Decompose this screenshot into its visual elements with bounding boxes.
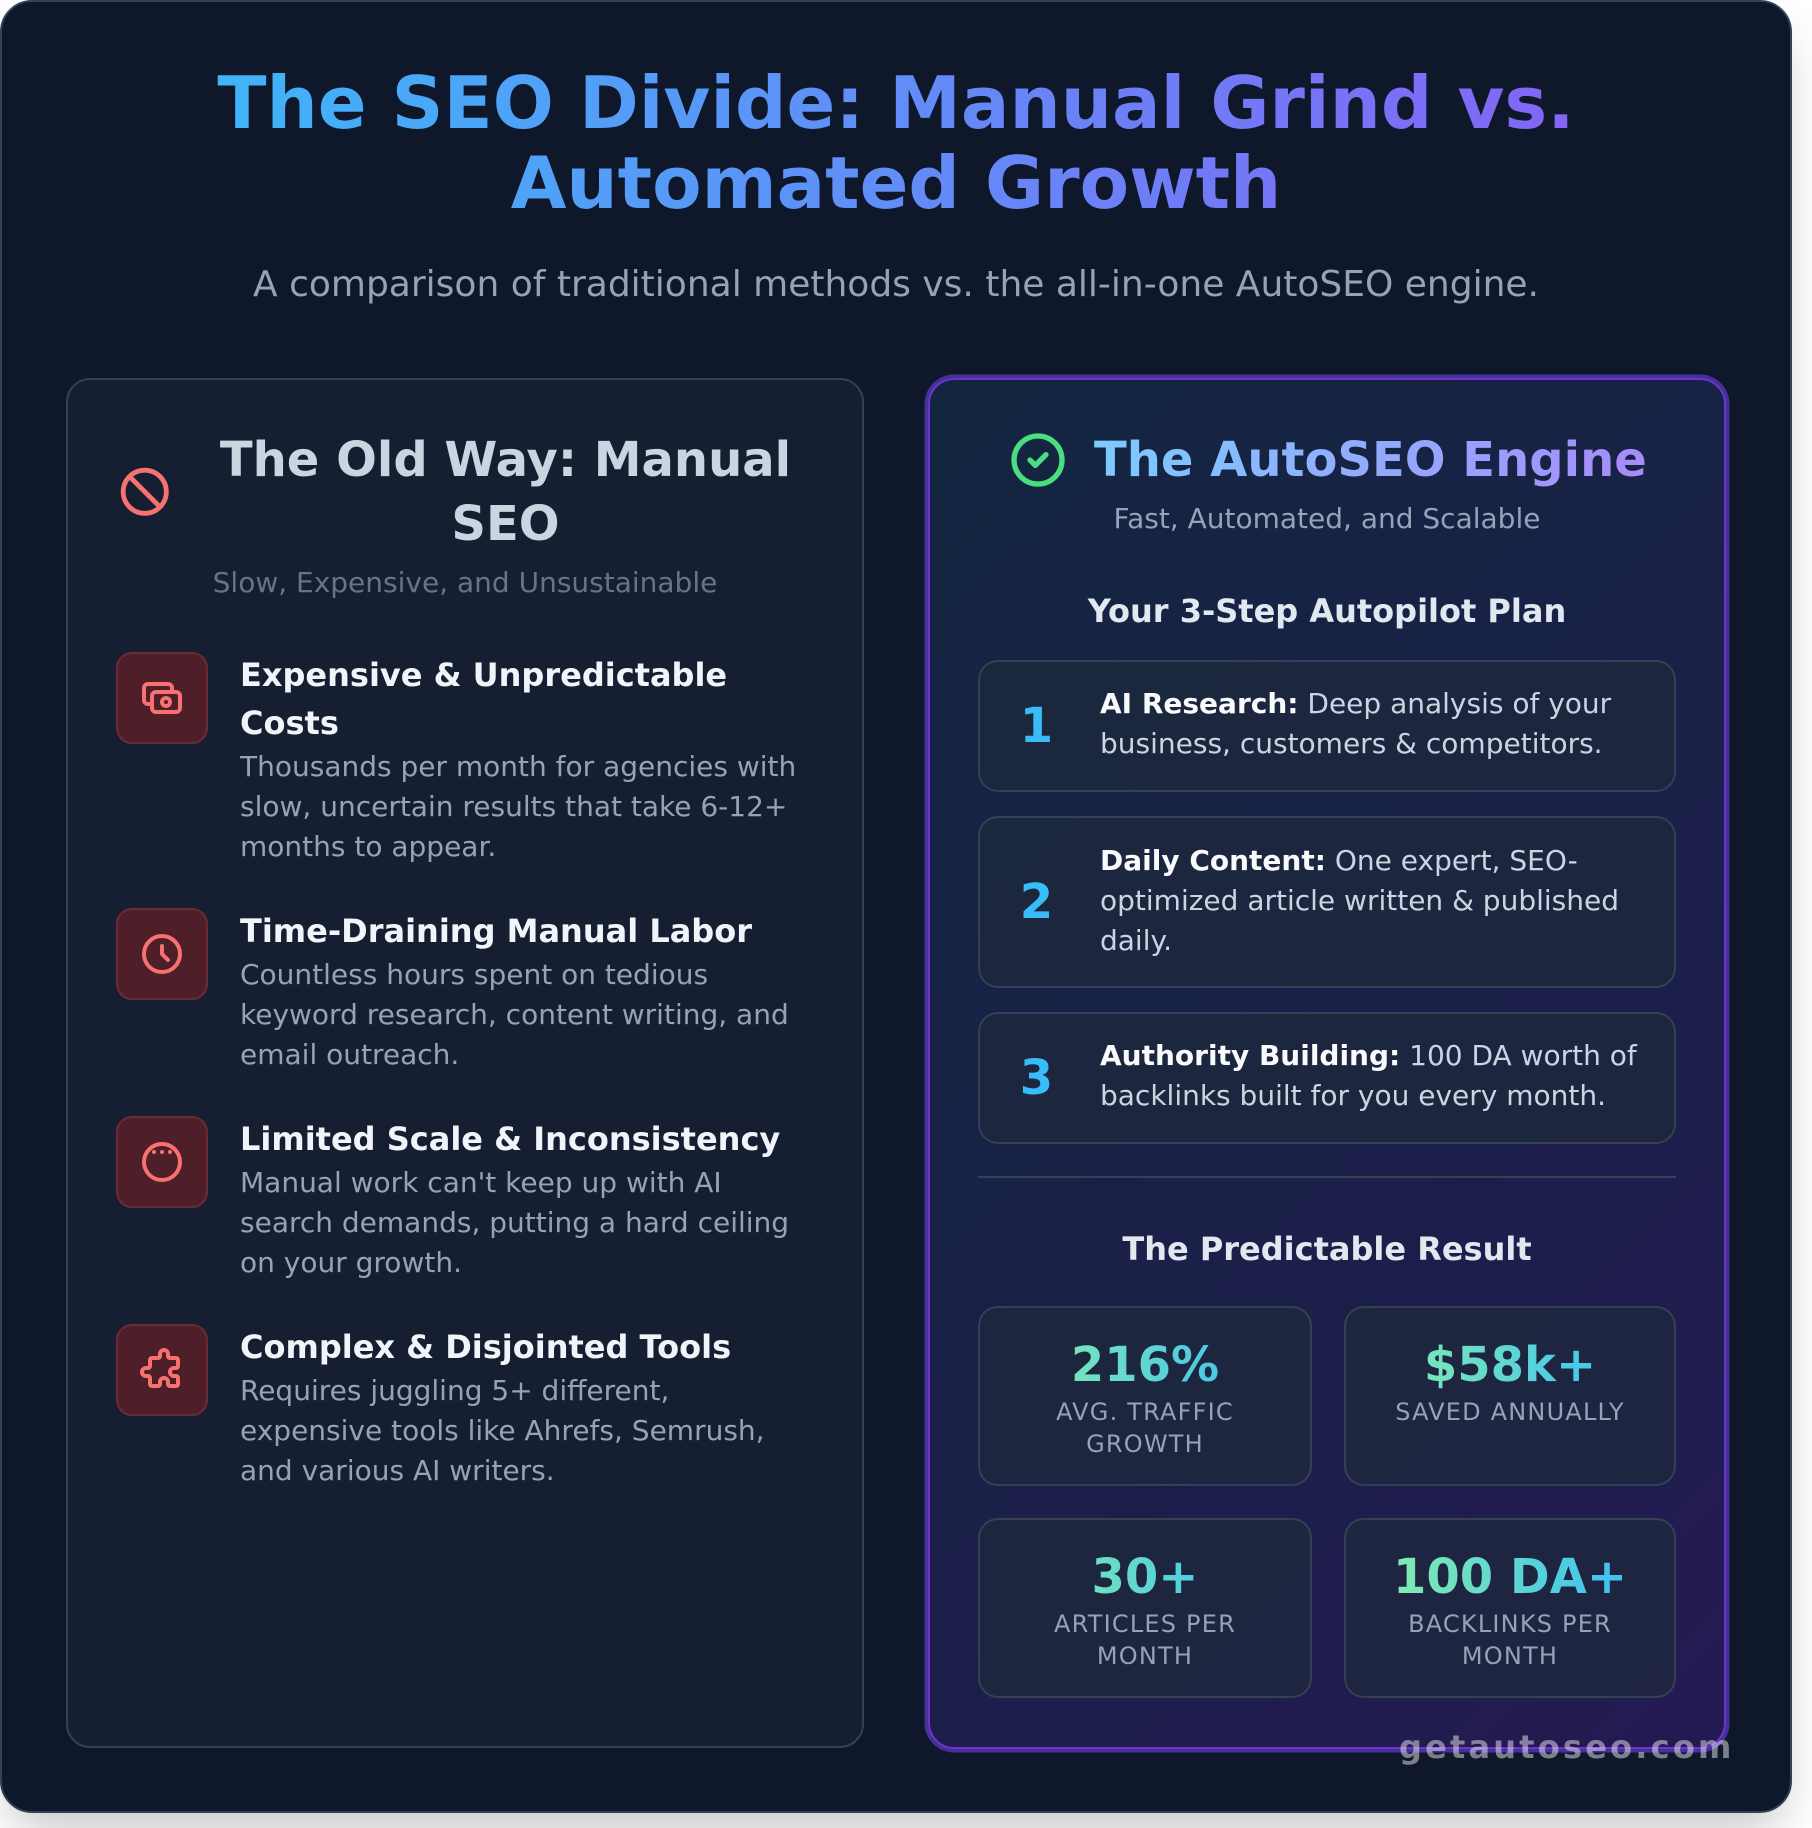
item description: Countless hours spent on tedious xyxy=(240,958,708,991)
item description: Thousands per month for agencies with xyxy=(240,750,796,783)
item description: email outreach. xyxy=(240,1038,459,1071)
plan heading: Your 3-Step Autopilot Plan xyxy=(1088,592,1566,630)
stat label: AVG. TRAFFIC xyxy=(1056,1398,1234,1426)
step text: AI Research: Deep analysis of your xyxy=(1100,687,1611,720)
item description: keyword research, content writing, and xyxy=(240,998,789,1031)
stat: articles per month xyxy=(978,1518,1312,1698)
item heading: Time-Draining Manual Labor xyxy=(240,912,752,950)
stat: backlinks per month xyxy=(1344,1518,1676,1698)
autoseo subheading: Fast, Automated, and Scalable xyxy=(1114,502,1540,535)
stat: saved annually xyxy=(1344,1306,1676,1486)
old way heading xyxy=(220,432,791,552)
item heading: Expensive & Unpredictable xyxy=(240,656,727,694)
old way heading: SEO xyxy=(451,496,560,552)
icon: dotted circle xyxy=(116,1116,208,1208)
step number: 1 xyxy=(1020,698,1053,754)
stat label: BACKLINKS PER xyxy=(1408,1610,1612,1638)
step 2 xyxy=(978,816,1676,988)
stat label xyxy=(1054,1610,1236,1670)
stat value: $58k+ xyxy=(1424,1337,1596,1393)
item description: on your growth. xyxy=(240,1246,462,1279)
step 3 xyxy=(978,1012,1676,1144)
step text: Daily Content: One expert, SEO- xyxy=(1100,844,1578,877)
item description: Requires juggling 5+ different, xyxy=(240,1374,669,1407)
step text: backlinks built for you every month. xyxy=(1100,1079,1606,1112)
step text xyxy=(1100,687,1612,760)
stat value: 216% xyxy=(1071,1337,1219,1393)
title: Automated Growth xyxy=(511,141,1281,225)
icon: check circle xyxy=(1011,433,1065,487)
stat value xyxy=(1010,1549,1280,1605)
item: expensive costs xyxy=(116,652,796,863)
step text xyxy=(1100,1039,1638,1112)
stat value xyxy=(1376,1337,1644,1393)
stat label: MONTH xyxy=(1097,1642,1193,1670)
item description: Manual work can't keep up with AI xyxy=(240,1166,722,1199)
item description: and various AI writers. xyxy=(240,1454,555,1487)
autoseo heading: The AutoSEO Engine xyxy=(1094,432,1647,488)
step number: 3 xyxy=(1020,1050,1053,1106)
stat: traffic growth xyxy=(978,1306,1312,1486)
item description: slow, uncertain results that take 6-12+ xyxy=(240,790,787,823)
icon: ban xyxy=(120,468,169,516)
step number: 2 xyxy=(1020,874,1053,930)
item description: months to appear. xyxy=(240,830,496,863)
item description: search demands, putting a hard ceiling xyxy=(240,1206,789,1239)
icon: cash xyxy=(116,652,208,744)
step text: Authority Building: 100 DA worth of xyxy=(1100,1039,1637,1072)
item heading xyxy=(240,656,727,742)
item heading: Costs xyxy=(240,704,339,742)
step 1 xyxy=(978,660,1676,792)
stat value xyxy=(1010,1337,1280,1393)
item heading: Limited Scale & Inconsistency xyxy=(240,1120,780,1158)
stat label: MONTH xyxy=(1462,1642,1558,1670)
item description xyxy=(240,958,789,1071)
stat label: GROWTH xyxy=(1086,1430,1204,1458)
step text: daily. xyxy=(1100,924,1172,957)
stat value: 30+ xyxy=(1091,1549,1198,1605)
stat label xyxy=(1056,1398,1234,1458)
step text: optimized article written & published xyxy=(1100,884,1619,917)
icon: puzzle xyxy=(116,1324,208,1416)
item: manual labor xyxy=(116,908,789,1071)
stat label xyxy=(1408,1610,1612,1670)
icon: clock xyxy=(116,908,208,1000)
panel: the old way xyxy=(66,378,864,1748)
item description: expensive tools like Ahrefs, Semrush, xyxy=(240,1414,765,1447)
watermark: getautoseo.com xyxy=(1399,1728,1735,1766)
item description xyxy=(240,1166,789,1279)
old way heading: The Old Way: Manual xyxy=(220,432,791,488)
panel: autoseo engine xyxy=(928,378,1726,1749)
item description xyxy=(240,750,796,863)
stat label: ARTICLES PER xyxy=(1054,1610,1236,1638)
title xyxy=(66,63,1726,223)
step text xyxy=(1100,844,1619,957)
item heading: Complex & Disjointed Tools xyxy=(240,1328,731,1366)
item: disjointed tools xyxy=(116,1324,765,1487)
result heading: The Predictable Result xyxy=(1122,1230,1532,1268)
stat value: 100 DA+ xyxy=(1393,1549,1627,1605)
old way subheading: Slow, Expensive, and Unsustainable xyxy=(213,566,717,599)
stat label: SAVED ANNUALLY xyxy=(1395,1398,1625,1426)
step text: business, customers & competitors. xyxy=(1100,727,1603,760)
item: limited scale xyxy=(116,1116,789,1279)
title: The SEO Divide: Manual Grind vs. xyxy=(217,61,1575,145)
item description xyxy=(240,1374,765,1487)
subtitle: A comparison of traditional methods vs. the all-in-one AutoSEO engine. xyxy=(253,264,1539,305)
